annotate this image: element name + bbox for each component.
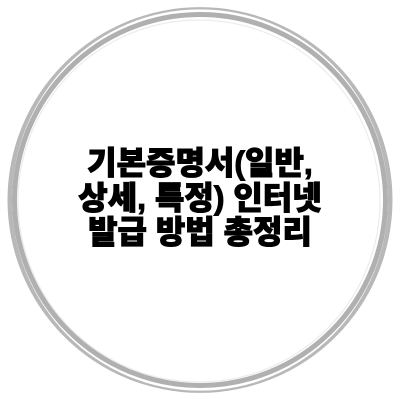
title line 3: 발급 방법 총정리 xyxy=(88,214,312,250)
title line 1: 기본증명서(일반, xyxy=(87,145,313,181)
title xyxy=(78,145,322,250)
title line 2: 상세, 특정) 인터넷 xyxy=(78,180,322,216)
